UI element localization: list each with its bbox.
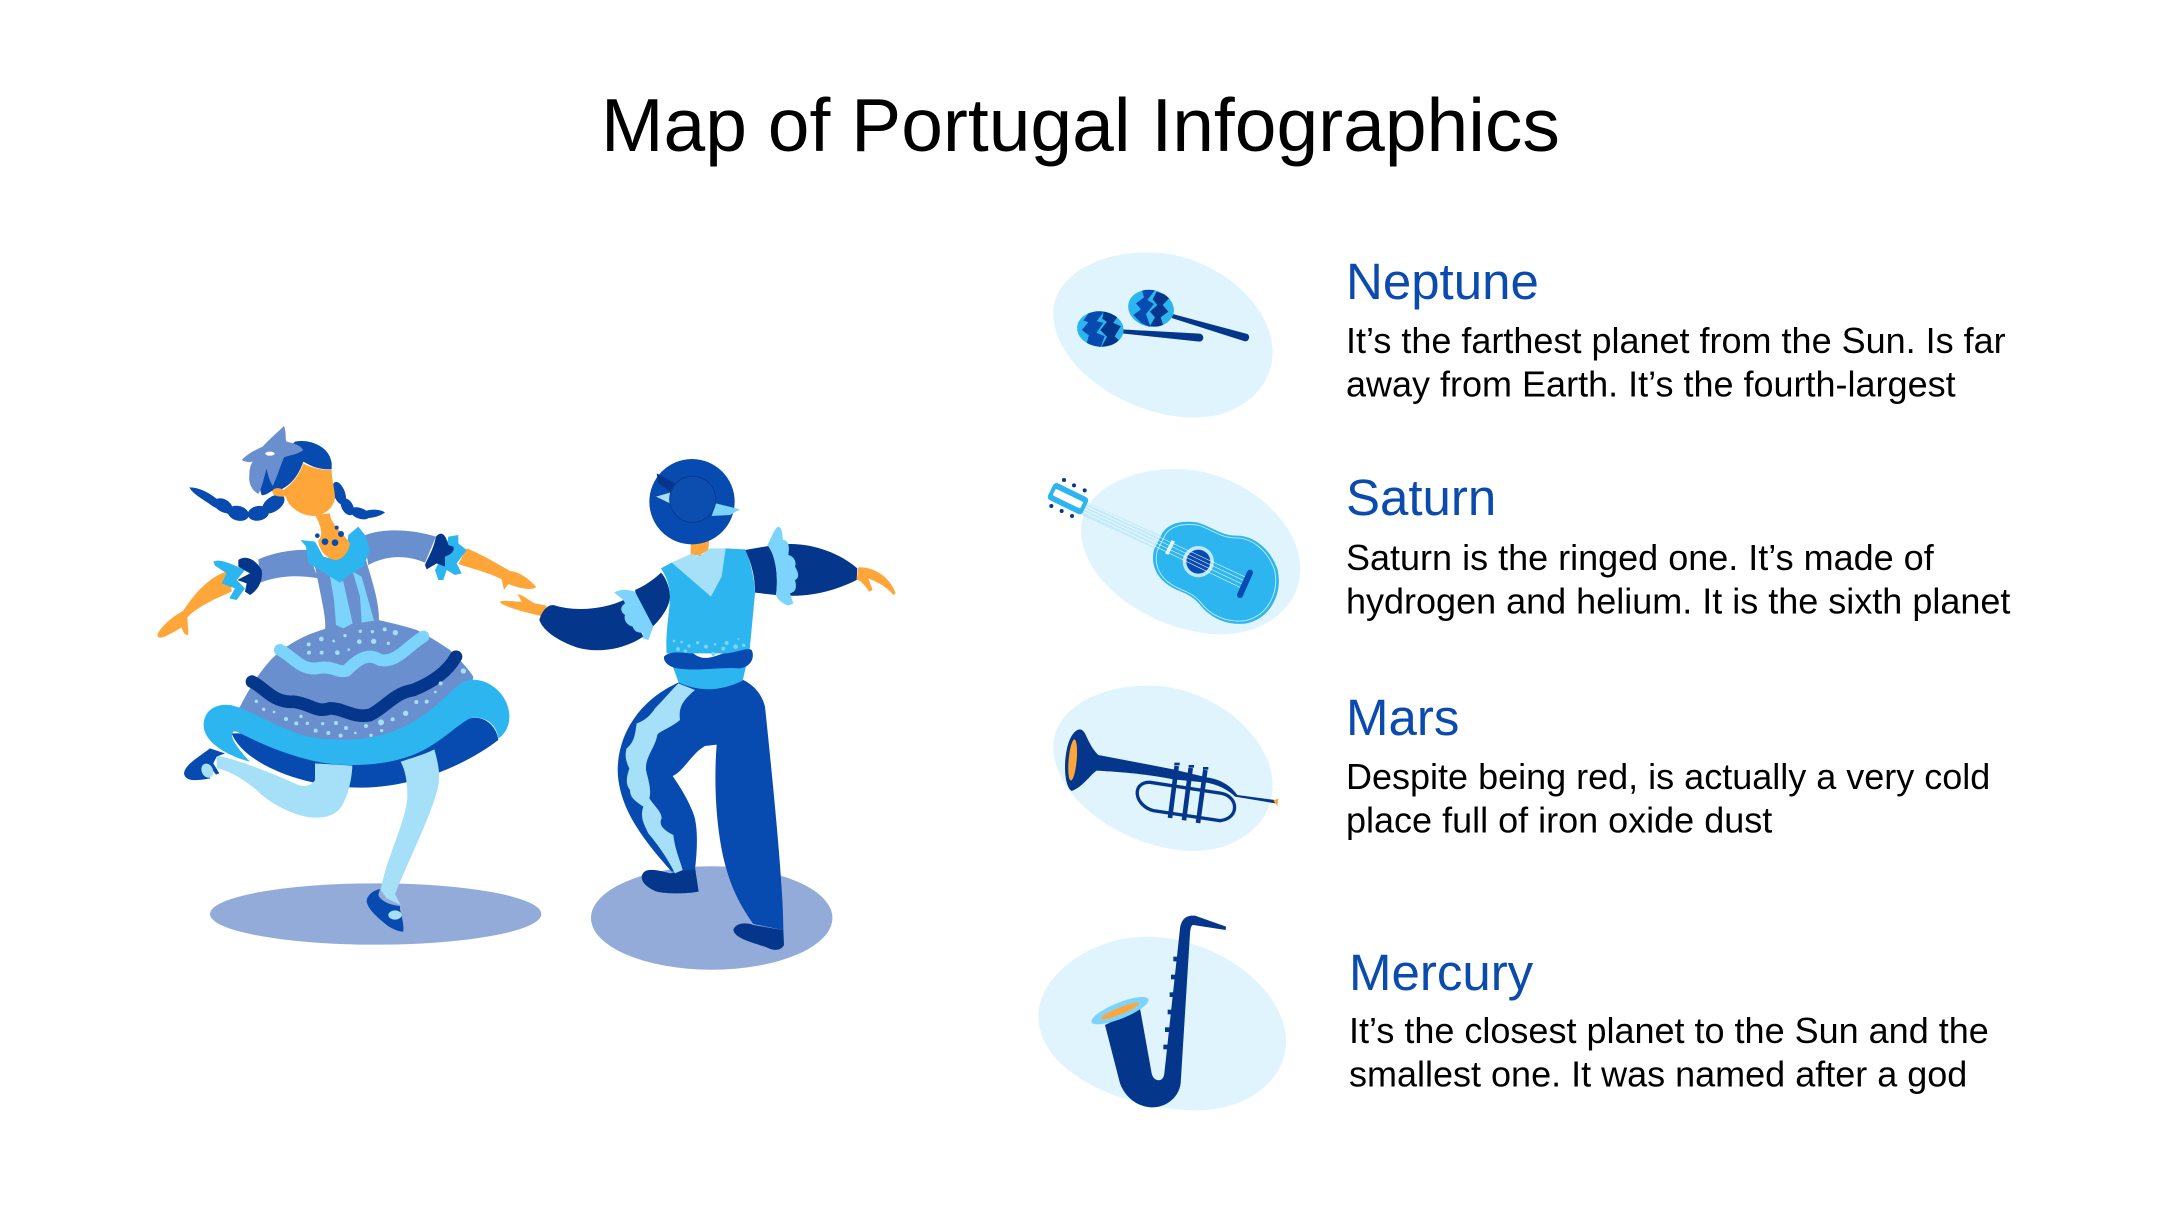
blob background [1081, 469, 1300, 634]
body text: It’s the farthest planet from the Sun. Is far [1346, 320, 2006, 361]
trousers and shoes [618, 680, 784, 950]
panel: Neptune item [1053, 252, 2006, 418]
face [272, 463, 335, 516]
hat [649, 459, 740, 544]
sound hole [1183, 546, 1214, 577]
icon: saxophone [1038, 916, 1286, 1110]
trousers [618, 680, 783, 930]
vest [661, 548, 755, 653]
right arm [458, 548, 536, 590]
collar [301, 527, 370, 583]
illustration: dancing man [500, 459, 896, 970]
maraca one [1077, 311, 1124, 347]
left upper sleeve [635, 573, 670, 627]
body text: away from Earth. It’s the fourth-largest [1346, 364, 1956, 404]
body text: It’s the closest planet to the Sun and the [1349, 1010, 1989, 1051]
skirt ruffle light [280, 637, 423, 671]
trumpet tube [1065, 729, 1275, 803]
blob background [1053, 252, 1273, 418]
bent leg [217, 756, 352, 818]
hair flower [242, 426, 303, 494]
man floor shadow [591, 866, 832, 970]
icon: maracas [1053, 252, 1273, 418]
vest collar [672, 548, 726, 597]
left cuff [213, 558, 262, 600]
skirt dots [255, 627, 466, 738]
strings [1083, 503, 1246, 587]
heading: Mercury [1349, 944, 1534, 1001]
neck [315, 513, 350, 560]
guitar body [1154, 523, 1278, 623]
heading: Neptune [1346, 253, 1539, 310]
panel: Saturn item [1047, 469, 2010, 634]
heading: Saturn [1346, 469, 1496, 526]
trouser stripe [626, 683, 695, 873]
title: Map of Portugal Infographics [601, 83, 1560, 167]
blob background [1053, 686, 1273, 851]
body text: place full of iron oxide dust [1346, 800, 1772, 840]
panel: Mars item [1053, 686, 1990, 851]
icon: trumpet [1053, 686, 1278, 851]
trumpet mouthpiece [1273, 798, 1278, 806]
maraca handles [1122, 314, 1249, 342]
right shoe [733, 923, 784, 950]
icon: guitar [1047, 469, 1300, 634]
illustration: dancing woman [157, 426, 541, 945]
body text: Saturn is the ringed one. It’s made of [1346, 537, 1935, 578]
body text: Despite being red, is actually a very cold [1346, 756, 1990, 797]
heading: Mars [1346, 689, 1459, 746]
left puff sleeve [539, 599, 643, 650]
upper body [500, 459, 896, 689]
sax bell inner [1100, 1000, 1140, 1022]
panel: Mercury item [1038, 916, 1989, 1110]
skirt hem band [204, 680, 509, 765]
trumpet loop [1137, 782, 1235, 821]
hair [260, 441, 332, 495]
left arm [157, 571, 232, 638]
sax body [1105, 916, 1226, 1107]
sax keys [1163, 957, 1178, 1049]
guitar neck [1082, 502, 1175, 555]
sax bell rim [1089, 992, 1151, 1030]
right puff sleeve [787, 544, 857, 596]
lifted shoe [184, 748, 225, 780]
headstock [1047, 478, 1089, 518]
trumpet valves [1170, 766, 1205, 823]
skirt ruffle navy [252, 657, 456, 716]
left shoe [642, 867, 699, 893]
blob background [1038, 937, 1286, 1110]
skirt underside [232, 718, 498, 788]
left sleeve frill [614, 590, 653, 640]
bodice [315, 557, 379, 630]
necklace [315, 526, 344, 546]
right sleeve [363, 530, 436, 565]
planted shoe [367, 889, 403, 932]
standing leg [381, 749, 439, 905]
left sleeve [258, 550, 318, 583]
woman floor shadow [210, 883, 541, 945]
left braid [189, 487, 288, 523]
bodice stripes [330, 572, 374, 628]
maraca two [1128, 290, 1174, 327]
trumpet bell opening [1067, 739, 1078, 781]
neck cap [1165, 540, 1175, 555]
body text: hydrogen and helium. It is the sixth planet [1346, 580, 2010, 622]
skirt [230, 620, 473, 743]
body inlay [1156, 525, 1276, 621]
right braid [330, 480, 385, 522]
right sleeve frill [767, 527, 798, 606]
valve caps [1174, 763, 1208, 770]
lower waistband [672, 663, 747, 689]
man right hand [857, 567, 896, 595]
bridge [1240, 573, 1250, 595]
right upper sleeve [745, 546, 777, 595]
right cuff [425, 534, 467, 580]
body text: smallest one. It was named after a god [1349, 1054, 1967, 1094]
vest dots [673, 638, 745, 656]
sash [664, 649, 753, 670]
man left hand [500, 594, 547, 617]
man neck [691, 538, 709, 555]
